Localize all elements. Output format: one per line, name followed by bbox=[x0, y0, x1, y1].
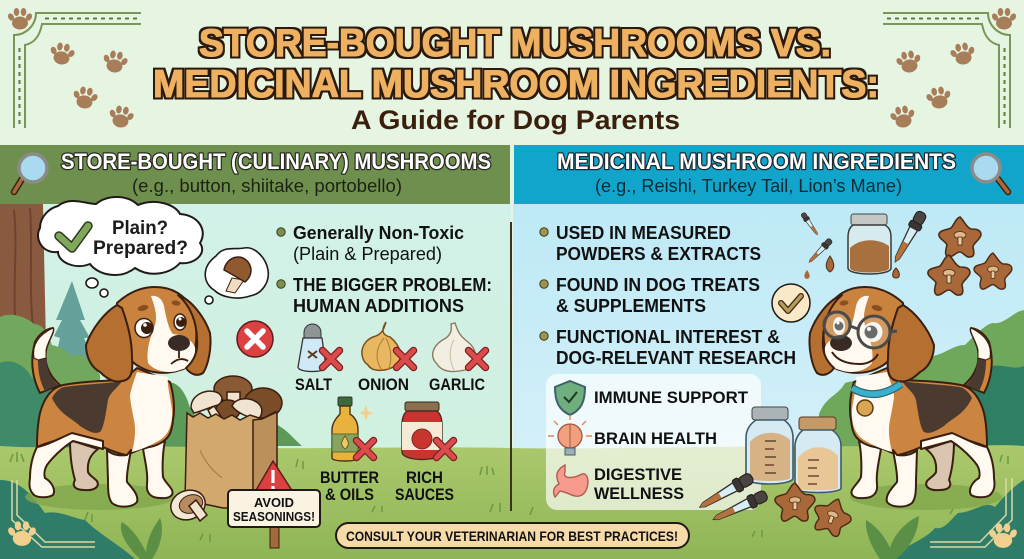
fallen mushroom bbox=[167, 485, 209, 525]
icon: garlic bbox=[433, 323, 486, 372]
subtitle: A Guide for Dog Parents bbox=[351, 105, 680, 135]
icon: shield bbox=[555, 381, 585, 415]
icon: sauce jar bbox=[402, 402, 454, 460]
icon: oil bottle bbox=[332, 397, 374, 461]
left bullets: Generally Non-Toxic bbox=[293, 222, 464, 243]
left bullets: (Plain & Prepared) bbox=[293, 243, 442, 264]
lower droppers and cookies bbox=[697, 471, 856, 540]
salt onion garlic labels: GARLIC bbox=[429, 376, 485, 394]
title: MEDICINAL MUSHROOM INGREDIENTS: bbox=[153, 63, 879, 106]
salt onion garlic labels bbox=[295, 376, 485, 394]
dog left: worried beagle bbox=[25, 287, 211, 510]
icon: green check bbox=[59, 226, 88, 248]
butter oils and rich sauces labels: RICH bbox=[406, 469, 443, 487]
pine tree bbox=[54, 281, 94, 360]
right bullets bbox=[540, 222, 796, 368]
sign text: SEASONINGS! bbox=[233, 509, 315, 524]
icon: onion bbox=[362, 322, 414, 370]
bush bottom right bbox=[866, 478, 1024, 559]
right bullets: & SUPPLEMENTS bbox=[556, 295, 706, 316]
icon: salt shaker bbox=[298, 324, 340, 372]
bushes left bbox=[0, 315, 302, 450]
thought cloud bbox=[38, 197, 203, 275]
grass tufts bbox=[10, 452, 1008, 542]
right bullets: DOG-RELEVANT RESEARCH bbox=[556, 347, 796, 368]
butter oils and rich sauces labels: SAUCES bbox=[395, 486, 454, 504]
left header heading: STORE-BOUGHT (CULINARY) MUSHROOMS bbox=[61, 149, 491, 174]
thought trail dots bbox=[86, 278, 213, 304]
cloud text: Prepared? bbox=[93, 238, 188, 259]
icon: check badge bbox=[772, 284, 810, 322]
dog right: smart beagle with glasses bbox=[809, 287, 1002, 510]
icon: magnifier right bbox=[972, 154, 1008, 192]
salt onion garlic labels: ONION bbox=[358, 376, 409, 394]
top supplements: droppers, jar, cookies bbox=[800, 209, 1012, 295]
panel: right header band bbox=[514, 145, 1024, 204]
left bullets bbox=[277, 222, 492, 316]
powder jars bbox=[746, 407, 841, 492]
bushes right bbox=[819, 310, 1024, 450]
right bullets: FUNCTIONAL INTEREST & bbox=[556, 326, 780, 347]
panel: benefits bbox=[546, 374, 761, 510]
right bullets: POWDERS & EXTRACTS bbox=[556, 243, 761, 264]
immune text: IMMUNE SUPPORT bbox=[594, 388, 749, 407]
bush bottom left bbox=[0, 480, 162, 559]
paw prints left bbox=[7, 8, 136, 130]
salt onion garlic labels: SALT bbox=[295, 376, 332, 394]
left bullets: HUMAN ADDITIONS bbox=[293, 295, 464, 316]
decorative corner frame right bbox=[883, 13, 1010, 128]
icon: magnifier left bbox=[14, 154, 47, 192]
icon: stomach bbox=[554, 465, 588, 497]
icon: red X circle bbox=[237, 321, 273, 357]
center divider bbox=[510, 222, 512, 511]
tree trunk bbox=[0, 204, 46, 345]
right bullets: FOUND IN DOG TREATS bbox=[556, 274, 760, 295]
sign text: AVOID bbox=[254, 495, 294, 510]
digestive text: DIGESTIVE bbox=[594, 465, 682, 484]
right bullets: USED IN MEASURED bbox=[556, 222, 731, 243]
title: STORE-BOUGHT MUSHROOMS VS. bbox=[199, 22, 831, 65]
cloud text: Plain? bbox=[112, 218, 168, 239]
paw prints right bbox=[888, 8, 1017, 130]
left bullets: THE BIGGER PROBLEM: bbox=[293, 274, 492, 295]
brain text: BRAIN HEALTH bbox=[594, 429, 717, 448]
panel: left header band bbox=[0, 145, 510, 204]
right header subtext: (e.g., Reishi, Turkey Tail, Lion’s Mane) bbox=[595, 175, 902, 196]
callout: consult veterinarian bbox=[336, 523, 689, 548]
panel: left sky bbox=[0, 204, 511, 464]
panel: right sky bbox=[513, 204, 1024, 464]
warning sign bbox=[228, 461, 320, 548]
left header subtext: (e.g., button, shiitake, portobello) bbox=[132, 175, 402, 196]
butter oils and rich sauces labels: & OILS bbox=[325, 486, 374, 504]
callout text: CONSULT YOUR VETERINARIAN FOR BEST PRACTICES! bbox=[346, 528, 678, 544]
digestive text: WELLNESS bbox=[594, 484, 684, 503]
butter oils and rich sauces labels bbox=[320, 469, 454, 504]
icon: brain bulb bbox=[548, 415, 592, 455]
ground bbox=[0, 445, 1024, 559]
decorative corner frame left bbox=[14, 13, 141, 128]
title bbox=[153, 22, 879, 106]
small thought bubble with mushroom bbox=[205, 248, 268, 298]
right header heading: MEDICINAL MUSHROOM INGREDIENTS bbox=[557, 149, 956, 174]
paper bag of mushrooms bbox=[185, 376, 282, 508]
butter oils and rich sauces labels: BUTTER bbox=[320, 469, 379, 487]
